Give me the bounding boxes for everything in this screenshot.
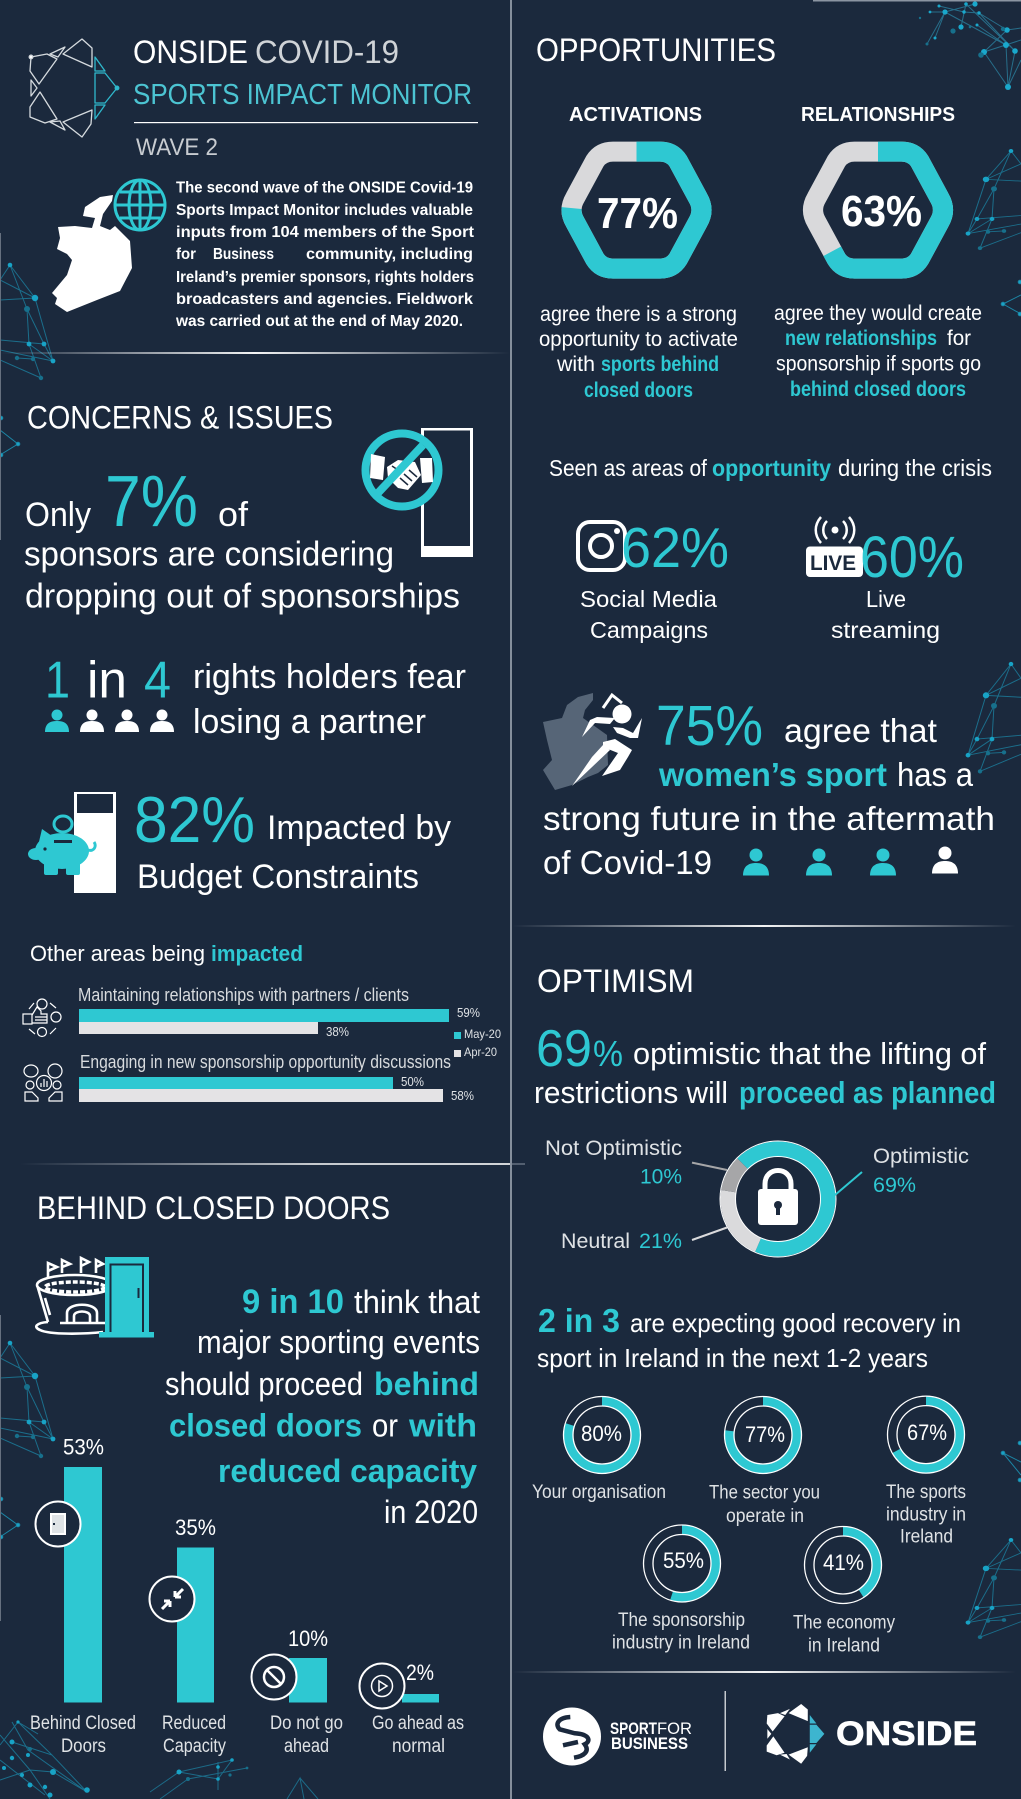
bar: behind closed doors: Doors [61, 1736, 106, 1757]
heading: OPPORTUNITIES [536, 32, 776, 68]
bar: reduced capacity: Reduced [162, 1713, 226, 1734]
column: relationships: RELATIONSHIPS [801, 104, 955, 126]
row: maintaining relationships [78, 985, 480, 1039]
column: activations: ACTIVATIONS [569, 104, 702, 126]
label: optimistic: Optimistic [873, 1145, 969, 1168]
bar: behind closed doors: 53% [63, 1434, 104, 1460]
stat: women's sport: agree that [784, 712, 937, 749]
central vertical divider [510, 0, 512, 1799]
text: 9 in 10: reduced capacity [218, 1453, 477, 1489]
text: 9 in 10 [165, 1283, 480, 1530]
network decoration: left small [0, 416, 20, 457]
stat: 1 in 4: rights holders fear [193, 658, 466, 696]
bar: reduced capacity [162, 1515, 226, 1757]
bar: go ahead as normal: 2% [406, 1660, 434, 1685]
caption: agree they would create [774, 302, 982, 325]
caption [774, 302, 982, 401]
stat: 2 in 3: sport in Ireland in the next 1-2 years [537, 1343, 928, 1373]
icon: live: LIVE [810, 552, 856, 575]
subheading: areas of opportunity [549, 455, 992, 481]
intro paragraph: inputs from 104 members of the Sport [176, 224, 474, 241]
label: optimistic: 69% [873, 1174, 916, 1197]
stat: 2 in 3 [537, 1302, 961, 1373]
intro paragraph: Sports Impact Monitor includes valuable [176, 202, 473, 219]
column: activations [539, 104, 738, 402]
panel: concerns and issues [23, 400, 501, 1103]
left edge lines [0, 233, 1, 1621]
network decoration: left lower [0, 1341, 55, 1458]
bar: reduced capacity: Capacity [163, 1736, 226, 1757]
panel: opportunities [536, 32, 995, 881]
network decoration: right small [1001, 280, 1021, 316]
stat: 69 percent: optimistic that the lifting of [633, 1036, 986, 1071]
stat: 2 in 3: 2 in 3 [538, 1302, 620, 1339]
stat: 1 in 4 [45, 652, 466, 741]
top edge line [813, 0, 1021, 2]
caption: closed doors [584, 379, 693, 402]
stat: women's sport: has a [897, 756, 974, 793]
stat: 69 percent [534, 1020, 996, 1110]
network decoration: right lower [966, 1538, 1021, 1639]
ring: the economy in Ireland: The economy [793, 1613, 895, 1634]
icon: discussion [24, 1064, 62, 1101]
ring: the sector you operate in: 77% [745, 1422, 785, 1447]
column: relationships [774, 104, 982, 401]
stat: 1 in 4: 4 [144, 652, 171, 710]
caption: opportunity to activate [539, 328, 738, 351]
panel: optimism [532, 963, 996, 1657]
footer divider [724, 1691, 726, 1771]
row: engaging in new sponsorship: 50% [401, 1075, 424, 1089]
stat: 69 percent: 69 [536, 1020, 592, 1078]
heading: OPTIMISM [537, 963, 694, 999]
chart heading: Other areas being [30, 941, 205, 966]
title rule [134, 122, 478, 123]
heading: CONCERNS & ISSUES [27, 400, 333, 436]
stat: 82 percent budget: Impacted by [267, 809, 451, 847]
text: 9 in 10: closed doors [169, 1408, 362, 1444]
ring: the sponsorship industry in Ireland: 55% [663, 1548, 704, 1573]
ring: the economy in Ireland: 41% [823, 1550, 864, 1575]
logo: Sport for Business: FOR [657, 1719, 692, 1738]
bar: reduced capacity: 35% [175, 1515, 216, 1540]
label: not optimistic: 10% [640, 1166, 682, 1189]
wave label: WAVE 2 [136, 134, 218, 161]
panel: behind closed doors [30, 1190, 480, 1757]
caption [539, 303, 738, 402]
stat: women's sport [543, 693, 995, 881]
ring: the sports industry in Ireland: The sports [886, 1482, 966, 1503]
stat: women's sport: of Covid-19 [543, 844, 712, 881]
intro paragraph: broadcasters and agencies. Fieldwork [176, 291, 473, 308]
legend: May-20 [464, 1027, 501, 1041]
intro paragraph [175, 180, 474, 330]
text: 9 in 10: with [408, 1408, 477, 1444]
row: engaging in new sponsorship [79, 1052, 474, 1103]
icon: Ireland silhouette [543, 693, 608, 790]
stat: 7 percent: Only [25, 496, 91, 534]
subheading: areas of opportunity: Seen as areas of [549, 455, 708, 481]
text: 9 in 10: major sporting events [197, 1324, 480, 1360]
logo: Sport for Business [543, 1708, 692, 1766]
intro paragraph: Ireland’s premier sponsors, rights holders [176, 269, 474, 286]
ring: the economy in Ireland [793, 1526, 895, 1657]
label: neutral: Neutral [561, 1230, 630, 1253]
icon: instagram [578, 522, 625, 570]
caption: sports behind [601, 353, 719, 376]
network decoration: right upper [966, 149, 1021, 250]
stat: 82 percent budget: Budget Constraints [137, 858, 419, 896]
label: optimistic [873, 1145, 969, 1197]
text: 9 in 10: in 2020 [384, 1494, 478, 1530]
icon: people row [45, 710, 174, 732]
row: maintaining relationships: 59% [457, 1006, 480, 1020]
network decoration: right lower small [1001, 1441, 1021, 1482]
stat: women's sport: 75% [656, 694, 763, 758]
caption: with [556, 353, 595, 376]
stat: 69 percent: restrictions will [534, 1075, 728, 1110]
text: 9 in 10: 9 in 10 [242, 1283, 344, 1321]
title: ONSIDE [133, 34, 248, 70]
ring: the sports industry in Ireland [886, 1396, 966, 1548]
logo: ONSIDE: ONSIDE [836, 1715, 977, 1753]
icon: prohibited badge [252, 1654, 296, 1700]
ring: the sponsorship industry in Ireland: The sponsorship [618, 1610, 745, 1631]
caption: new relationships [785, 327, 937, 350]
icon: piggy bank [28, 816, 95, 875]
text: 9 in 10: or [372, 1408, 398, 1444]
subheading: areas of opportunity: during the crisis [838, 455, 992, 481]
intro paragraph: was carried out at the end of May 2020. [175, 313, 463, 330]
donut chart: optimism split [545, 1128, 969, 1270]
stat: live streaming: streaming [831, 617, 940, 643]
network decoration: bottom left [0, 1720, 90, 1799]
row: maintaining relationships: 38% [326, 1025, 349, 1039]
ring: your organisation [532, 1396, 666, 1503]
label: not optimistic [545, 1137, 682, 1189]
legend [454, 1027, 501, 1059]
stat: 1 in 4: losing a partner [193, 703, 426, 741]
icon: level bar [74, 792, 116, 893]
stat: 82 percent budget: 82% [134, 783, 255, 856]
network decoration: left lower small [0, 1497, 20, 1539]
network decoration: top right [919, 1, 1021, 90]
chart heading [30, 941, 303, 966]
intro paragraph: for [176, 246, 196, 263]
ring: the sports industry in Ireland: 67% [907, 1420, 947, 1445]
stat: 69 percent: % [593, 1033, 623, 1074]
footer logos [543, 1691, 977, 1771]
bar chart: other areas being impacted [23, 941, 501, 1103]
ring: the sector you operate in: The sector you [709, 1482, 820, 1504]
icon: runner [572, 695, 642, 786]
icon: play badge [360, 1664, 404, 1708]
caption: for [947, 327, 971, 350]
ring: the sponsorship industry in Ireland: industry in Ireland [612, 1632, 750, 1654]
stat: live streaming [806, 517, 964, 643]
icon: no handshake with level bar [366, 428, 473, 557]
label: neutral [561, 1230, 682, 1253]
icon: globe [115, 180, 165, 230]
stat: 2 in 3: are expecting good recovery in [630, 1308, 961, 1338]
stat: 7 percent: sponsors are considering [24, 536, 394, 574]
stat: social media: 62% [621, 516, 729, 580]
logo: Sport for Business: BUSINESS [611, 1734, 688, 1753]
bar: go ahead as normal: normal [392, 1736, 445, 1757]
icon: people row [743, 846, 958, 876]
stat: social media [578, 516, 729, 643]
bar: do not go ahead [270, 1626, 343, 1757]
ring: the sector you operate in [709, 1396, 820, 1527]
network decoration: left upper [0, 263, 55, 380]
bar: behind closed doors [30, 1434, 136, 1757]
icon: stadium with door [36, 1257, 154, 1338]
text: 9 in 10: behind [374, 1366, 479, 1402]
ring: the sector you operate in: operate in [726, 1506, 804, 1527]
icon: relationships [23, 999, 61, 1036]
label: neutral: 21% [639, 1230, 682, 1253]
title: SPORTS IMPACT MONITOR [133, 79, 472, 111]
bar: behind closed doors: Behind Closed [30, 1713, 136, 1734]
intro paragraph: Business [213, 246, 274, 263]
bar: do not go ahead: 10% [288, 1626, 328, 1651]
hexagon chart: 63 percent: 63% [841, 187, 922, 236]
network decoration: bottom centre [150, 1758, 318, 1799]
hexagon chart: 63 percent [813, 152, 943, 269]
stat: women's sport: strong future in the aftermath [543, 800, 995, 837]
logo: ONSIDE [767, 1704, 977, 1764]
ring: your organisation: 80% [581, 1421, 622, 1446]
ring: the economy in Ireland: in Ireland [808, 1636, 880, 1657]
stat: social media: Social Media [580, 586, 717, 612]
hexagon chart: 77 percent [572, 152, 702, 269]
bar: do not go ahead: ahead [284, 1736, 329, 1757]
heading: BEHIND CLOSED DOORS [37, 1190, 390, 1226]
subheading: areas of opportunity: opportunity [712, 455, 831, 481]
ring: the sports industry in Ireland: Ireland [900, 1526, 953, 1548]
bar: do not go ahead: Do not go [270, 1713, 343, 1734]
row: maintaining relationships: Maintaining relationships with partners / clients [78, 985, 409, 1005]
icon: live [806, 517, 863, 577]
bar: go ahead as normal: Go ahead as [372, 1713, 464, 1734]
stat: 7 percent: of [218, 496, 249, 534]
stat: 7 percent: 7% [105, 462, 198, 542]
bar chart: event preference [30, 1434, 464, 1757]
bar: go ahead as normal [372, 1660, 464, 1757]
stat: social media: Campaigns [590, 617, 708, 643]
stat: 1 in 4: 1 [45, 652, 70, 710]
stat: 82 percent budget [28, 783, 451, 896]
stat: women's sport: women’s sport [658, 756, 887, 793]
icon: map of Ireland [52, 195, 132, 312]
ring: the sponsorship industry in Ireland [612, 1525, 750, 1654]
ring: the sports industry in Ireland: industry in [886, 1505, 966, 1526]
stat: live streaming: 60% [860, 525, 964, 590]
intro paragraph: community, including [306, 246, 473, 263]
text: 9 in 10: think that [354, 1284, 480, 1320]
legend: Apr-20 [464, 1045, 497, 1059]
icon: reduce badge [150, 1576, 194, 1622]
icon: door badge [36, 1502, 80, 1546]
stat: 7 percent [24, 462, 460, 616]
caption: agree there is a strong [540, 303, 737, 326]
stat: 7 percent: dropping out of sponsorships [25, 578, 460, 616]
title: COVID-19 [255, 34, 399, 70]
title [133, 34, 472, 111]
caption: behind closed doors [790, 378, 966, 401]
logo: ONSIDE outline star [29, 39, 119, 137]
stat: live streaming: Live [866, 586, 906, 612]
label: not optimistic: Not Optimistic [545, 1137, 682, 1160]
hexagon chart: 77 percent: 77% [597, 189, 678, 238]
row: engaging in new sponsorship: 58% [451, 1089, 474, 1103]
icon: padlock [758, 1170, 798, 1225]
logo: Sport for Business: SPORT [610, 1719, 657, 1738]
row: engaging in new sponsorship: Engaging in new sponsorship opportunity discussions [80, 1052, 451, 1072]
stat: 1 in 4: in [87, 652, 127, 710]
ring: your organisation: Your organisation [532, 1482, 666, 1503]
panel: header [29, 34, 478, 330]
chart heading: impacted [211, 941, 303, 966]
intro paragraph: The second wave of the ONSIDE Covid-19 [176, 180, 473, 196]
caption: sponsorship if sports go [776, 352, 981, 376]
network decoration: right middle [966, 662, 1021, 773]
text: 9 in 10: should proceed [165, 1366, 363, 1402]
